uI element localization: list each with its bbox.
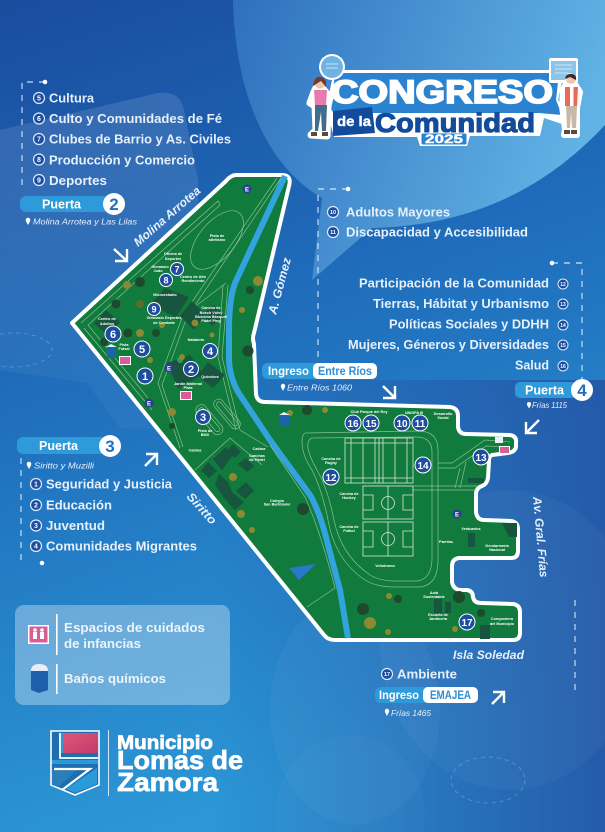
list: Puerta 4 topics: 15 bbox=[560, 343, 566, 349]
badge: Ingreso EMAJEA bbox=[375, 687, 478, 703]
chemical toilets and care-space icons on map bbox=[106, 344, 510, 454]
topic: Ambiente: 17 bbox=[384, 672, 390, 678]
map labels: Centro de Alto bbox=[180, 275, 207, 279]
map number markers: 7 bbox=[174, 264, 180, 274]
map labels: Gimnasio Deportes bbox=[147, 316, 181, 320]
arrow: Molina Arrotea entrance bbox=[114, 249, 127, 261]
map labels: Vestuarios bbox=[461, 527, 481, 531]
badge: Puerta 2 bbox=[20, 193, 125, 215]
badge: Puerta 4 bbox=[515, 379, 593, 401]
icon: man bbox=[562, 74, 580, 135]
arrow: Siritto entrance bbox=[145, 454, 157, 466]
map number markers: 17 bbox=[461, 618, 473, 629]
street label: A. Gómez: A. Gómez bbox=[265, 256, 294, 317]
map labels: Centro de bbox=[98, 317, 116, 321]
list: Puerta 2 topics: Deportes bbox=[49, 173, 107, 188]
list: Puerta 4 topics: Políticas Sociales y DDHH bbox=[389, 316, 549, 332]
map labels: Canchas bbox=[249, 454, 265, 458]
map labels: Sustentable bbox=[423, 595, 445, 599]
map labels: Pista de bbox=[210, 234, 224, 238]
logo shield bbox=[51, 731, 99, 795]
map labels: Nacional bbox=[489, 548, 505, 552]
list: Puerta 3 topics: Comunidades Migrantes bbox=[46, 538, 197, 554]
rugby field bbox=[345, 438, 413, 483]
list: Puerta 3 topics: 2 bbox=[34, 502, 38, 510]
map labels: Microestadio bbox=[153, 293, 177, 297]
map labels: Parrilas bbox=[439, 540, 453, 544]
list: Puerta 2 topics: Producción y Comercio bbox=[49, 152, 195, 168]
dashed guide: group 3 bbox=[21, 458, 44, 565]
list: Puerta 2 topics: 5 bbox=[37, 96, 41, 102]
badge: Puerta 3: 3 bbox=[105, 437, 115, 456]
map labels: Deportes bbox=[165, 257, 181, 261]
icon: speech bubble left bbox=[319, 54, 345, 80]
map labels: Cabina bbox=[189, 448, 202, 452]
map labels: Gendarmería bbox=[485, 544, 510, 548]
badge: Ingreso EMAJEA: EMAJEA bbox=[430, 690, 471, 702]
arrow: Puerta 4 entrance bbox=[526, 420, 539, 433]
badge: Puerta 3 bbox=[17, 435, 121, 457]
map labels: Cancha de bbox=[339, 525, 359, 529]
trees bbox=[100, 276, 485, 635]
list: Puerta 3 topics: Educación bbox=[46, 498, 112, 512]
badge: Ingreso Entre Ríos bbox=[262, 363, 377, 379]
map: park bbox=[72, 175, 520, 640]
badge: Puerta 3: Puerta bbox=[39, 439, 79, 453]
map labels: Jardín Maternal bbox=[174, 382, 202, 386]
icon: care space bbox=[28, 625, 49, 644]
map labels: Fútsal bbox=[118, 347, 130, 351]
street label: Molina Arrotea: Molina Arrotea bbox=[131, 183, 204, 249]
map labels: Cabina bbox=[253, 447, 266, 451]
map labels: Hockey bbox=[342, 496, 357, 500]
badge: Puerta 4: 4 bbox=[577, 381, 587, 400]
list: Puerta 2 topics: Culto y Comunidades de Fé bbox=[49, 111, 222, 126]
map number markers: 15 bbox=[365, 419, 377, 430]
list: Puerta 2 topics: Cultura bbox=[49, 90, 95, 106]
title: Congreso de la Comunidad 2025: CONGRESO bbox=[331, 74, 553, 110]
topic: Ambiente: Ambiente bbox=[397, 666, 457, 682]
address: Molina Arrotea y Las Lilas: Molina Arrotea y Las Lilas bbox=[33, 216, 137, 226]
map labels: atletismo bbox=[209, 238, 226, 242]
map number markers: 11 bbox=[415, 419, 426, 430]
dashed guide: bottom right bbox=[574, 600, 576, 693]
map labels: Cancha de bbox=[201, 306, 221, 310]
map labels: BMX bbox=[201, 433, 210, 437]
map labels: Rugby bbox=[325, 461, 338, 465]
logo text: Municipio bbox=[117, 733, 213, 754]
badge: Puerta 4: Puerta bbox=[525, 384, 565, 398]
river bbox=[229, 176, 348, 638]
address: Entre Ríos 1060: Entre Ríos 1060 bbox=[287, 382, 352, 392]
map labels: Pista de bbox=[198, 429, 212, 433]
list: center topics: 11 bbox=[330, 230, 336, 236]
list: Puerta 3 topics: 4 bbox=[34, 544, 38, 550]
dashed guide: group 2 bbox=[22, 80, 47, 190]
map number markers: 2 bbox=[188, 364, 194, 376]
list: Puerta 2 topics: 9 bbox=[37, 178, 41, 184]
icon: speech bubble right bbox=[549, 58, 578, 83]
list: Puerta 3 topics: 1 bbox=[34, 482, 38, 488]
badge: Puerta 2: 2 bbox=[109, 195, 119, 214]
map number markers: 1 bbox=[142, 371, 148, 383]
map number markers: E bbox=[455, 512, 459, 518]
list: Puerta 2 topics: Clubes de Barrio y As. Civiles bbox=[49, 132, 231, 146]
list: Puerta 2 topics bbox=[34, 90, 231, 188]
map labels: Gimnasio bbox=[151, 265, 169, 269]
arrow: Entre Ríos entrance bbox=[383, 386, 395, 398]
list: center topics: 10 bbox=[330, 210, 336, 216]
map number markers: 14 bbox=[417, 461, 429, 472]
icon: woman bbox=[310, 77, 331, 136]
map number markers: 12 bbox=[325, 473, 337, 484]
map labels: Bosch Vóley bbox=[200, 311, 223, 315]
list: Puerta 4 topics: Tierras, Hábitat y Urbanismo bbox=[373, 296, 549, 311]
soccer field 2 bbox=[363, 522, 413, 556]
map labels: Fútbol bbox=[343, 529, 355, 533]
legend text: care spaces: Espacios de cuidados bbox=[64, 620, 205, 635]
map number markers: 4 bbox=[207, 346, 214, 358]
legend text: chemical toilets: Baños químicos bbox=[64, 671, 166, 686]
street label: Av. Gral. Frías: Av. Gral. Frías bbox=[530, 495, 551, 578]
list: Puerta 4 topics: 12 bbox=[560, 282, 566, 288]
map labels: Natatorio bbox=[188, 338, 205, 342]
map labels: Cancha de bbox=[321, 457, 341, 461]
map labels: Adultos bbox=[100, 322, 114, 326]
dashed guide: center bbox=[318, 187, 350, 362]
map labels: Cancha de bbox=[339, 492, 359, 496]
list: Puerta 2 topics: 7 bbox=[37, 136, 41, 144]
list: Puerta 3 topics: Juventud bbox=[46, 518, 105, 533]
icon: chemical toilet bbox=[31, 664, 48, 693]
map labels: San Bartolomé bbox=[264, 502, 290, 506]
map number markers: E bbox=[167, 366, 171, 372]
map number markers: 9 bbox=[151, 304, 157, 314]
map labels: Compostera bbox=[491, 617, 514, 621]
soccer field 1 bbox=[363, 486, 413, 519]
map number markers: 6 bbox=[110, 329, 116, 341]
park outline bbox=[72, 175, 520, 640]
badge: Ingreso Entre Ríos: Entre Ríos bbox=[318, 366, 372, 378]
map number markers: E bbox=[147, 402, 151, 408]
address: Siritto y Muzilli: Siritto y Muzilli bbox=[34, 460, 95, 470]
list: Puerta 4 topics: Mujeres, Géneros y Diversidades bbox=[348, 337, 549, 352]
map labels: Pádel Ping bbox=[201, 319, 221, 323]
map number markers: 13 bbox=[475, 453, 487, 464]
map labels bbox=[98, 234, 515, 626]
map labels: Bicicleta Básquet bbox=[195, 315, 228, 319]
title: Congreso de la Comunidad 2025: de la bbox=[337, 113, 371, 129]
address: Frías 1115: Frías 1115 bbox=[532, 400, 567, 410]
dashed guide: group 4 bbox=[550, 261, 582, 380]
map labels: Pista bbox=[119, 343, 129, 347]
legend text: care spaces: de infancias bbox=[64, 636, 141, 651]
roads and paths bbox=[81, 178, 510, 607]
logo text: Lomas de bbox=[117, 745, 243, 775]
logo: Municipio Lomas de Zamora bbox=[51, 730, 243, 797]
title: Congreso de la Comunidad 2025 bbox=[310, 54, 580, 146]
map number markers: 10 bbox=[396, 419, 408, 430]
list: center topics: Discapacidad y Accesibilidad bbox=[346, 224, 528, 240]
map labels: de Pádel bbox=[249, 458, 265, 462]
map labels: Quinchos bbox=[201, 375, 219, 379]
map labels: Velódromo bbox=[375, 564, 395, 568]
map number markers: E bbox=[245, 188, 249, 194]
list: Puerta 3 topics: 3 bbox=[34, 523, 38, 530]
list: Puerta 4 topics: 14 bbox=[560, 323, 566, 329]
arrow: EMAJEA entrance bbox=[492, 692, 504, 704]
map labels: Aula bbox=[430, 591, 439, 595]
map labels: Jardinería bbox=[429, 617, 448, 621]
map labels: Pista bbox=[183, 386, 193, 390]
map labels: Judo bbox=[153, 269, 163, 273]
list: Puerta 4 topics: Salud bbox=[515, 358, 549, 372]
street label: Siritto: Siritto bbox=[184, 490, 220, 527]
map labels: UNIDPA III bbox=[405, 411, 423, 415]
badge: Ingreso Entre Ríos: Ingreso bbox=[268, 366, 309, 378]
map labels: Colegio bbox=[270, 499, 285, 503]
map number markers bbox=[105, 184, 489, 630]
map labels: del Municipio bbox=[490, 622, 515, 626]
pond bbox=[289, 564, 316, 580]
list: Puerta 3 topics bbox=[30, 476, 197, 554]
badge: Puerta 2: Puerta bbox=[42, 198, 82, 212]
street label: Isla Soledad: Isla Soledad bbox=[453, 648, 525, 662]
badge: Ingreso EMAJEA: Ingreso bbox=[379, 690, 419, 702]
legend text: care spaces bbox=[64, 620, 205, 651]
list: center topics: Adultos Mayores bbox=[346, 204, 450, 220]
map labels: de Combate bbox=[153, 321, 175, 325]
logo text bbox=[117, 733, 243, 797]
map labels: Club Parque del Rey bbox=[351, 410, 388, 414]
list: Puerta 3 topics: Seguridad y Justicia bbox=[46, 476, 173, 492]
map number markers: 8 bbox=[163, 276, 169, 286]
map number markers: 5 bbox=[139, 344, 145, 356]
map number markers: 3 bbox=[200, 412, 206, 424]
map labels: Escuela de bbox=[428, 613, 448, 617]
map labels: Desarrollo bbox=[434, 412, 453, 416]
logo text: Zamora bbox=[117, 767, 219, 797]
list: Puerta 4 topics bbox=[348, 276, 568, 372]
map labels: Oficina de bbox=[164, 252, 182, 256]
list: Puerta 4 topics: 16 bbox=[560, 364, 566, 370]
buildings bbox=[94, 288, 517, 639]
address: Frías 1465: Frías 1465 bbox=[391, 708, 431, 718]
title: Congreso de la Comunidad 2025: 2025 bbox=[425, 134, 464, 146]
list: Puerta 2 topics: 6 bbox=[37, 116, 41, 123]
list: Puerta 4 topics: Participación de la Comunidad bbox=[359, 276, 549, 290]
list: center topics bbox=[328, 204, 528, 240]
panel: legend bbox=[15, 605, 230, 705]
list: Puerta 2 topics: 8 bbox=[37, 157, 41, 164]
map labels: Social bbox=[437, 416, 449, 420]
map labels: Rendimiento bbox=[182, 279, 205, 283]
list: Puerta 4 topics: 13 bbox=[560, 302, 566, 308]
map number markers: 16 bbox=[347, 419, 359, 430]
title: Congreso de la Comunidad 2025: Comunidad bbox=[375, 108, 535, 138]
